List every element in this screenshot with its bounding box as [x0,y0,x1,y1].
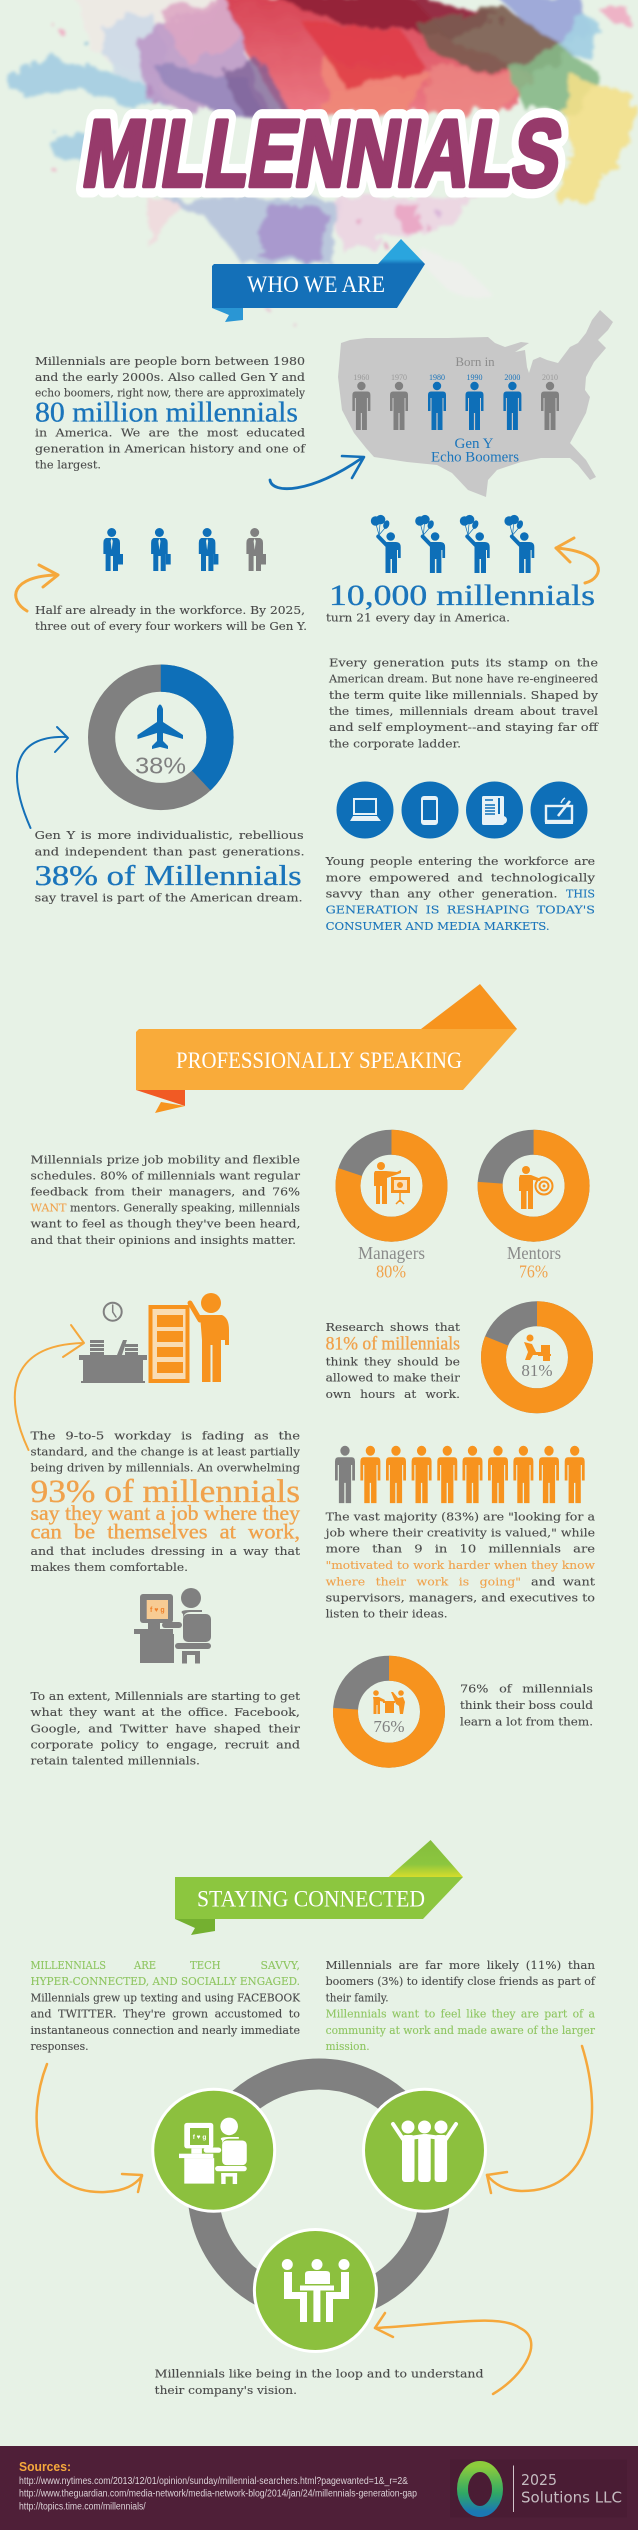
icon: person at desk [524,1334,551,1361]
text: tech savvy: SAVVY, [260,1958,300,1972]
panel: professionally speaking [15,984,595,1768]
text: to an extent [30,1689,301,1768]
text: boss could learn: 76% of millennials [460,1682,593,1696]
map: born in chart: 1990 [466,373,482,382]
icon: laptop [336,782,394,838]
logo: 2025 Solutions LLC: 2025 [521,2471,557,2489]
text: close friends: Millennials want to feel like they are part of a [326,2007,595,2021]
panel: footer [0,2446,638,2530]
icon: green circle computer [153,2089,275,2211]
icon: green circle computer: f ♥ g [193,2134,206,2141]
icon: person at computer: f ♥ g [150,1607,165,1614]
text: job mobility: Millennials prize job mobility and flexible [30,1152,300,1166]
donut chart: 81% own hours: 81% [521,1361,553,1380]
map: born in chart: 2010 [542,373,558,382]
text: 93% of millennials: say they want a job where they [30,1501,301,1525]
text: to an extent: retain talented millennials. [30,1754,200,1768]
text: tech savvy: ARE [133,1958,156,1972]
map: born in chart: 1960 [353,373,369,382]
text: american dream: and self employment--and staying far off [329,720,599,734]
banner: professionally speaking [136,984,517,1113]
panel: who we are [16,239,613,933]
text: boss could learn: think their boss could [460,1698,594,1712]
text: 93% of millennials: standard, and the change is at least partially [30,1445,301,1459]
text: job mobility: feedback from their managers, and 76% [30,1184,300,1198]
text: job mobility [30,1152,301,1247]
banner: staying connected [175,1840,463,1935]
banner: who we are [212,239,425,322]
text: job mobility: schedules. 80% of millennials want regular [30,1168,301,1182]
text: tech savvy [30,1958,300,2053]
text: sources: http://topics.time.com/millennials/ [19,2502,146,2512]
text: american dream: the corporate ladder. [329,736,461,750]
text: american dream: the times, millennials dream about travel [329,704,598,718]
arrow: orange left [37,2064,142,2192]
icon: green circle meeting [254,2230,376,2352]
donut chart: mentors 76%: 76% [519,1262,548,1282]
text: tech savvy: TECH [190,1958,221,1972]
text: close friends: mission. [326,2039,370,2053]
icon: person at computer [134,1588,211,1664]
arrow: orange to desk [15,1325,84,1450]
text: who millennials are: Millennials are people born between 1980 [35,354,305,368]
text: 81% research: think they should be [326,1355,460,1369]
text: american dream: the term quite like millennials. Shaped by [329,688,599,702]
banner: who we are: WHO WE ARE [247,272,385,297]
text: vast majority: supervisors, managers, and executives to [326,1591,595,1605]
text: 93% of millennials: and that includes dressing in a way that [30,1544,300,1558]
logo: 2025 Solutions LLC [450,2460,627,2518]
logo: 2025 Solutions LLC: Solutions LLC [521,2489,622,2507]
map: born in chart: 2000 [504,373,520,382]
text: close friends: boomers (3%) to identify close friends as part of [326,1974,596,1988]
donut chart: 38% travel: 38% [135,752,186,778]
text: job mobility: WANT [30,1201,67,1215]
text: 93% of millennials: being driven by millennials. An overwhelming [30,1461,301,1475]
map: born in chart: 1980 [429,373,445,382]
text: in the loop: Millennials like being in the loop and to understand [155,2367,484,2381]
text: american dream: Every generation puts its stamp on the [329,656,598,670]
text: who millennials are: 80 million millennials [35,398,298,429]
text: young people [325,854,596,933]
text: 38% of millennials: 38% of Millennials [35,860,302,892]
arrow: orange bottom [375,2313,531,2394]
text: who millennials are: generation in American history and one of [35,442,306,456]
icon: tablet [466,782,523,838]
text: young people: more empowered and technologically [326,870,596,884]
text: vast majority: more than 9 in 10 millennials are [326,1542,595,1556]
text: 10,000 millennials: 10,000 millennials [329,579,595,612]
arrow: orange to workers [16,565,58,611]
banner: professionally speaking: PROFESSIONALLY SPEAKING [176,1048,462,1073]
banner: staying connected: STAYING CONNECTED [197,1887,425,1912]
text: 93% of millennials: 93% of millennials [30,1474,300,1510]
text: to an extent: To an extent, Millennials are starting to get [30,1689,300,1703]
text: 81% research: allowed to make their [326,1371,461,1385]
text: vast majority: The vast majority (83%) are "looking for a [326,1510,595,1524]
text: 93% of millennials: The 9-to-5 workday is fading as the [30,1428,300,1442]
text: in the loop [155,2367,484,2397]
text: close friends: community at work and made aware of the larger [326,2023,595,2037]
text: vast majority: and want [531,1574,595,1588]
text: sources: Sources: [19,2459,71,2474]
ring diagram [153,2074,485,2352]
text: 93% of millennials: can be themselves at work, [30,1519,300,1543]
text: boss could learn: learn a lot from them. [460,1714,593,1728]
text: tech savvy: instantaneous connection and nearly immediate [30,2023,300,2037]
icon row: men with balloons [371,515,534,573]
text: half in workforce [35,603,307,633]
text: in the loop: their company's vision. [155,2383,297,2397]
map: born in chart: Gen Y [454,436,494,452]
text: vast majority: job where their creativity is valued," while [323,1526,595,1540]
text: half in workforce: Half are already in the workforce. By 2025, [35,603,305,617]
icon: mentor with target [519,1166,552,1209]
icon: drawing tablet [530,782,588,838]
text: 38% of millennials: and independent than past generations. [35,845,305,859]
text: young people: THIS [566,887,595,901]
text: tech savvy: MILLENNIALS [30,1958,106,1972]
donut chart: 81% own hours [494,1314,580,1401]
text: american dream [328,656,599,750]
text: american dream: American dream. But none have re-engineered [328,672,599,686]
text: tech savvy: HYPER-CONNECTED, AND SOCIALLY ENGAGED. [30,1974,300,1988]
text: tech savvy: and TWITTER. They're grown accustomed to [30,2007,300,2021]
icon: boss meeting [373,1690,405,1714]
icon: desk [79,1340,147,1383]
icon: presenter [374,1162,410,1204]
icon row: devices [336,782,588,838]
arrow: orange right [487,2046,592,2193]
text: close friends [326,1958,596,2053]
donut chart: 38% travel [102,678,220,796]
icon row: four workers [103,528,266,571]
donut chart: managers 80%: 80% [376,1262,406,1282]
icon: clock [104,1303,122,1321]
map: born in chart: Echo Boomers [431,450,519,466]
donut chart: mentors 76%: Mentors [507,1243,561,1263]
text: job mobility: want to feel as though they've been heard, [30,1217,300,1231]
icon: phone [402,782,458,838]
map: born in chart: Born in [455,354,495,369]
map: born in chart: 1970 [391,373,407,382]
icon: green circle team [364,2089,486,2211]
donut chart: managers 80%: Managers [358,1243,425,1263]
text: 81% research: 81% of millennials [326,1333,460,1354]
text: 93% of millennials: makes them comfortable. [30,1560,188,1574]
text: 93% of millennials [30,1428,301,1574]
text: young people: GENERATION IS RESHAPING TODAY'S [326,903,595,917]
text: 38% of millennials: Gen Y is more individualistic, rebellious [35,828,304,842]
text: who millennials are: the largest. [35,457,101,471]
text: close friends: Millennials are far more likely (11%) than [326,1958,596,1972]
text: vast majority: listen to their ideas. [326,1607,448,1621]
text: sources [19,2459,417,2512]
illustration: desk and filing cabinet [79,1293,229,1383]
text: vast majority: where their work is going" [326,1574,521,1588]
text: young people: CONSUMER AND MEDIA MARKETS. [326,919,550,933]
text: close friends: their family. [326,1990,389,2004]
arrow: blue to donut [17,727,68,828]
watercolor splash [8,0,636,322]
text: 81% research: Research shows that [326,1320,460,1334]
text: who millennials are: in America. We are the most educated [35,426,306,440]
map: born in chart [338,310,613,497]
text: vast majority: "motivated to work harder when they know [326,1558,595,1572]
icon: filing cabinet [148,1305,190,1383]
text: to an extent: Google, and Twitter have shaped their [30,1721,301,1735]
donut chart: 76% boss: 76% [373,1717,405,1736]
text: 81% research: own hours at work. [326,1387,460,1401]
donut chart: 76% boss [346,1668,432,1755]
text: job mobility: and that their opinions and insights matter. [30,1233,296,1247]
icon: person at cabinet [190,1293,229,1382]
donut chart: managers 80% [348,1142,435,1282]
text: tech savvy: responses. [30,2039,88,2053]
text: to an extent: what they want at the office. Facebook, [30,1705,300,1719]
icon row: ten people [335,1446,585,1503]
text: 10,000 millennials [326,579,595,625]
text: 10,000 millennials: turn 21 every day in America. [326,611,510,625]
donut chart: mentors 76% [490,1142,577,1282]
text: who millennials are [35,354,306,471]
text: boss could learn [460,1682,594,1728]
text: sources: http://www.nytimes.com/2013/12/01/opinion/sunday/millennial-searchers.html?pagewanted=1&_r=2& [19,2476,408,2487]
text: young people: savvy than any other generation. [326,887,558,901]
text: young people: Young people entering the workforce are [325,854,595,868]
text: tech savvy: Millennials grew up texting and using FACEBOOK [30,1990,300,2004]
text: vast majority [323,1510,595,1621]
text: who millennials are: echo boomers, right now, there are approximately [35,386,305,400]
text: half in workforce: three out of every four workers will be Gen Y. [35,619,307,633]
arrow: orange to balloons [556,538,598,583]
text: 81% research [326,1320,461,1401]
text: 38% of millennials [35,828,305,905]
text: sources: http://www.theguardian.com/media-network/media-network-blog/2014/jan/24/millennials-generation-gap [19,2489,417,2500]
text: to an extent: corporate policy to engage, recruit and [30,1738,301,1752]
panel: staying connected [30,1840,596,2397]
text: job mobility: mentors. Generally speaking, millennials [70,1201,300,1215]
text: 38% of millennials: say travel is part of the American dream. [35,891,303,905]
text: who millennials are: and the early 2000s. Also called Gen Y and [35,370,306,384]
arrow: blue to map [270,456,364,489]
